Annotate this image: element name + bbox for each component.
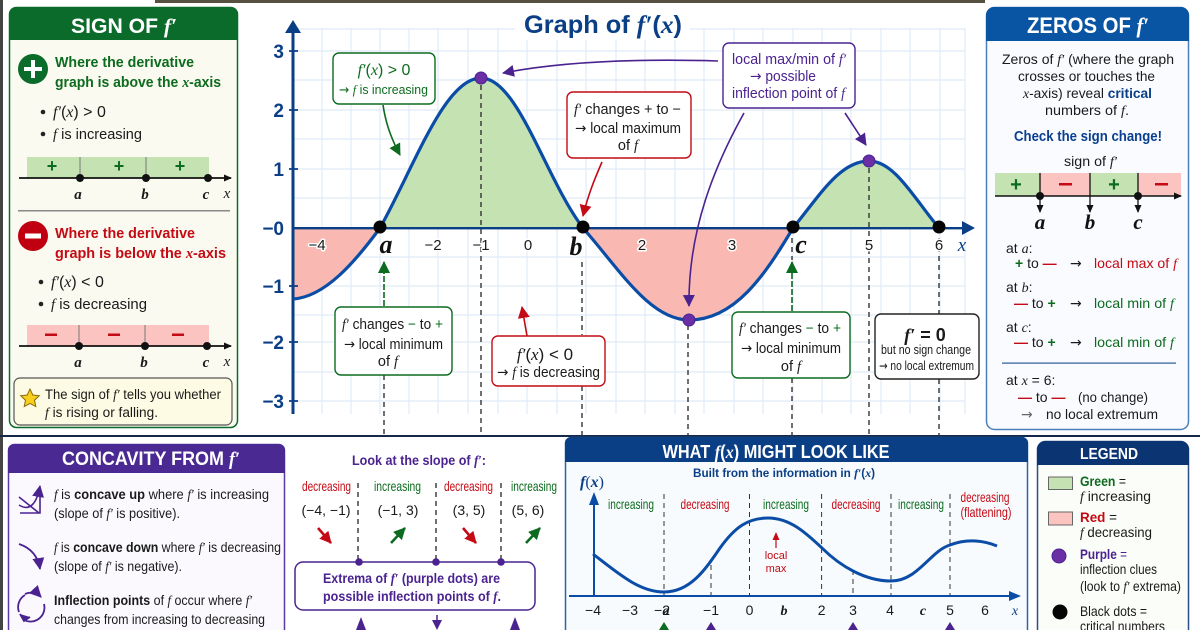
number line: negative [19,325,231,371]
text: sign change at c [1006,319,1176,351]
text: below the axis: Where the derivative [55,225,195,242]
x axis labels: 2 [818,602,826,618]
title: Graph of f′(x) [524,11,682,39]
x axis labels: a [662,604,670,619]
text: negative bullets: f is decreasing [51,296,147,313]
text: positive bullets [41,104,142,143]
legend: green: Green = [1080,473,1126,489]
heading: concavity: CONCAVITY FROM f′ [62,449,240,470]
x axis labels: −2 [424,237,442,254]
interval ranges: (3, 5) [453,502,485,518]
x axis labels: 5 [946,602,954,618]
legend: green: f increasing [1080,488,1151,505]
local max label: local [765,550,787,562]
x axis labels: c [795,230,807,259]
text: sign change at a [1006,240,1179,272]
interval labels: increasing [374,478,421,494]
interval labels: increasing [898,496,944,512]
local max label [765,532,787,575]
interval labels: increasing [763,496,809,512]
text: positive bullets: f is increasing [53,126,142,143]
text: sign change at c: at c: [1006,319,1032,336]
x axis labels: 6 [981,602,989,618]
x axis labels: b [780,604,788,619]
y axis labels: −3 [262,392,284,413]
callout: extrema of f': Extrema of f′ (purple dots) are [323,571,500,586]
interval ranges [301,502,544,518]
arrow: up to a [383,262,385,306]
callout: inflection clue: inflection point of f [732,86,847,102]
x axis labels: −1 [472,237,490,254]
arrow: to decreasing [522,307,527,336]
arrow: to increasing [383,105,400,155]
icon: concave up [19,486,40,513]
text: positive bullets: f′(x) > 0 [53,104,106,121]
callout: no sign change: → no local extremum [879,358,974,373]
legend: red: f decreasing [1080,524,1152,541]
arrow: up to c [791,262,793,311]
x axis labels: 0 [524,237,532,254]
text: sign change at c: local min of f [1094,334,1176,351]
text: sign change at a: at a: [1006,240,1032,257]
curve of f [593,518,997,592]
callout: extrema of f': possible inflection points of f. [323,589,501,604]
x axis labels: −1 [703,602,719,618]
text: inflection: changes from increasing to decreasing [54,611,265,627]
text: check sign change: Check the sign change! [1014,129,1162,145]
callout: inflection clue [723,43,855,108]
text: at x = 6: — to — [1018,389,1065,405]
number line: positive: + [114,156,124,176]
guide lines [384,85,939,436]
interval labels [302,478,557,494]
panel: zeros of f' [986,7,1189,430]
callout: sign tip: The sign of f′ tells you whether [45,387,221,402]
text: zeros description: Zeros of f′ (where the graph [1002,51,1174,68]
text: at x = 6: → [1021,407,1033,423]
interval labels: decreasing [680,496,730,512]
text: concave up: (slope of f′ is positive). [54,505,180,522]
interval ranges: (−4, −1) [301,502,351,518]
x axis labels: 5 [865,237,873,254]
x axis labels: 6 [935,237,943,254]
legend: purple: (look to f′ extrema) [1080,578,1181,595]
legend: black [1052,603,1165,630]
interval dividers [358,483,501,560]
x axis labels: x [1011,604,1019,619]
text: concave up: f is concave up where f′ is increasing [54,486,269,503]
number line: negative: b [140,355,148,371]
legend: purple: inflection clues [1080,561,1157,577]
text: below the axis [55,225,226,262]
legend: purple [1052,546,1181,595]
callout: decreasing: f′(x) < 0 [517,345,573,364]
shaded regions [380,78,939,228]
panel: legend [1037,441,1189,630]
arrow: to first peak [503,60,718,73]
sign chart: a [1035,210,1045,234]
number line: negative: a [74,355,82,371]
callout: sign tip: f is rising or falling. [45,405,158,420]
text: sign change at a: + to — [1015,255,1057,271]
icon: inflection cycle [18,593,44,622]
x axis labels: 4 [886,602,894,618]
callout: increasing [333,53,435,104]
text: sign change at a: → [1070,256,1082,272]
x axis labels: x [957,235,967,256]
callout: extrema of f' [295,558,535,610]
chart: graph of f'(x) [262,8,979,436]
callout: minimum at a: → local minimum [344,337,443,353]
interval guides [664,494,950,596]
arrow: to b [583,162,602,216]
text: above the axis: graph is above the x-axis [55,74,221,91]
callout: minimum at a: of f [378,354,400,370]
arrow: to trough [689,113,744,306]
text: sign change at c: → [1070,335,1082,351]
x axis labels: 0 [746,602,754,618]
callout: decreasing: → f is decreasing [497,365,600,381]
number line: positive: x [223,186,231,202]
x axis labels: a [380,230,392,259]
text: at x = 6 [1006,372,1158,423]
sign chart [995,153,1181,234]
bottom arrows [659,622,955,630]
icon: concave down [19,544,40,569]
callout: local maximum [567,92,691,158]
text: at x = 6: no local extremum [1046,406,1158,422]
text: negative bullets: f′(x) < 0 [51,274,104,291]
x axis labels: −4 [585,602,601,618]
number line: positive: + [47,156,57,176]
callout: minimum at c: f′ changes − to + [739,321,841,337]
text: above the axis [55,54,221,91]
text: at x = 6: (no change) [1078,389,1148,405]
text: sign change at b [1006,279,1176,312]
callout: no sign change: but no sign change [881,343,971,357]
y axis labels: 2 [273,101,284,122]
interval labels: increasing [608,496,654,512]
x axis labels [308,230,967,261]
panel: sign of f' [9,7,238,428]
number line: positive: + [175,156,185,176]
interval labels: decreasing [832,496,880,512]
callout: minimum at c: of f [781,359,803,375]
icon: star [21,389,39,407]
y axis labels [262,42,284,413]
text: sign change at b: at b: [1006,279,1032,296]
critical points [374,220,946,234]
text: concave down [54,539,281,575]
sign chart: sign of f′ [1064,153,1118,170]
legend: red [1048,509,1152,541]
callout: minimum at a [335,307,452,375]
inflection points [475,72,875,326]
text: below the axis: graph is below the x-axis [55,245,226,262]
axes [569,492,1021,601]
subtitle: Built from the information in f′(x) [693,466,875,480]
number line: positive: c [203,187,210,203]
text: zeros description: crosses or touches the [1018,68,1155,84]
interval ranges: (−1, 3) [378,502,418,518]
heading: legend: LEGEND [1080,446,1138,463]
icon: minus circle [18,221,48,251]
panel: what f(x) might look like [565,437,1028,630]
callout: local maximum: of f [618,138,640,154]
callout: increasing: f′(x) > 0 [358,62,411,79]
text: concave up [54,486,269,522]
text: zeros description: numbers of f. [1045,102,1129,119]
callout: local maximum: f′ changes + to − [574,102,681,118]
interval ranges: (5, 6) [512,502,544,518]
callout: inflection clue: local max/min of f′ [732,52,847,68]
slope arrows [318,528,540,543]
sign chart: b [1085,210,1095,234]
y axis labels: 1 [273,160,284,181]
text: sign change at a: local max of f [1094,255,1179,272]
text: zeros description: x-axis) reveal critical [1022,85,1152,102]
interval labels: decreasing [302,478,351,494]
x axis labels: −4 [308,237,326,254]
local max label: max [766,563,787,575]
number line: positive: a [74,187,82,203]
callout: no sign change [875,314,979,379]
text: above the axis: Where the derivative [55,54,194,71]
callout: inflection clue: → possible [750,69,816,85]
x axis labels: b [570,232,582,261]
curve of f' [293,78,939,320]
text: concave down: (slope of f′ is negative). [54,558,182,575]
panel: concavity from f' [8,444,285,630]
sign chart: + [1010,174,1022,196]
y axis labels: −2 [262,333,284,354]
axis label: f(x) [580,474,604,491]
callout: increasing: → f is increasing [339,82,428,98]
text: inflection: Inflection points of f occur where f′ [54,592,253,609]
interval labels: decreasing [960,489,1010,505]
text: sign change at c: — to + [1014,334,1056,350]
callout: minimum at a: f′ changes − to + [342,317,443,333]
number line: positive: b [141,187,149,203]
number line: negative: x [223,354,231,370]
legend: red: Red = [1080,509,1117,525]
y axis labels: −1 [262,277,284,298]
x axis labels: −2 [654,602,670,618]
heading: look at slope: Look at the slope of f′: [352,452,486,469]
x axis labels: 2 [638,237,646,254]
legend: green [1048,473,1151,505]
heading: sign of f': SIGN OF f′ [71,14,177,38]
text: concave down: f is concave down where f′ is decreasing [54,539,281,556]
interval labels: (flattening) [960,504,1012,520]
heading: zeros: ZEROS OF f′ [1027,13,1149,38]
legend: purple: Purple = [1080,546,1127,562]
text: sign change at b: — to + [1014,295,1056,311]
heading: WHAT f(x) MIGHT LOOK LIKE [662,442,890,462]
callout: minimum at c [732,312,850,378]
icon: plus circle [18,54,48,84]
arrow: to second peak [845,113,866,145]
text: zeros description [1002,51,1174,119]
x axis labels [585,602,1019,619]
grid [293,28,965,414]
text: at x = 6: at x = 6: [1006,372,1055,389]
text: sign change at b: local min of f [1094,295,1176,312]
number line: positive [19,156,231,203]
callout: no sign change: f′ = 0 [904,325,946,345]
text: inflection [54,592,265,627]
x axis labels: c [920,604,927,619]
number line: negative: c [203,355,210,371]
legend: black: Black dots = [1080,603,1147,619]
callout: minimum at c: → local minimum [741,341,841,357]
sign chart: c [1133,210,1143,234]
callout: sign tip [14,378,232,425]
axes [285,20,975,414]
x axis labels: 3 [728,237,736,254]
interval labels [608,489,1012,520]
callout: decreasing [492,336,605,386]
x axis labels: −3 [622,602,638,618]
text: sign change at b: → [1070,296,1082,312]
y axis labels: −0 [262,219,284,240]
panel: slope of f' [295,452,557,630]
interval labels: increasing [511,478,557,494]
sign chart: + [1108,174,1120,196]
callout: local maximum: → local maximum [575,121,681,137]
x axis labels: 3 [849,602,857,618]
y axis labels: 3 [273,42,284,63]
bottom arrows [356,615,520,630]
text: negative bullets [39,274,147,313]
interval labels: decreasing [444,478,493,494]
